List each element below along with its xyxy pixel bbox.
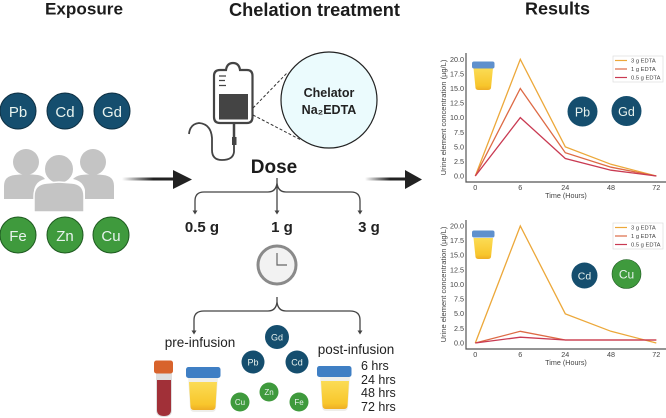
y axis labels: 20.0 <box>450 222 464 230</box>
dose labels: 3 g <box>358 219 380 236</box>
metals cluster: Cu <box>235 398 245 407</box>
metals cluster: Zn <box>264 388 274 397</box>
exposure metals: toxic: Cd <box>55 104 75 121</box>
y axis labels <box>450 55 464 180</box>
exposure metals: essential: Zn <box>56 228 74 245</box>
x axis labels: 72 <box>652 183 660 192</box>
x axis labels <box>439 226 660 367</box>
exposure metals: essential <box>0 217 129 253</box>
legend: 0.5 g EDTA <box>631 242 661 248</box>
chart: Pb and Gd <box>439 53 666 200</box>
legend: 0.5 g EDTA <box>631 76 661 82</box>
line: 0.5 g EDTA <box>475 118 656 176</box>
y axis labels: 7.5 <box>454 294 464 304</box>
chart: Cd and Cu <box>439 220 666 367</box>
dose labels <box>185 219 380 236</box>
icon: urine cup pre-infusion <box>186 367 220 412</box>
arrow: dose bracket <box>192 178 362 214</box>
y axis labels: 5.0 <box>454 309 464 318</box>
icon: blood tube <box>154 360 173 417</box>
line: 1 g EDTA <box>475 331 656 343</box>
x axis labels <box>439 59 660 200</box>
line: 3 g EDTA <box>475 226 656 343</box>
metals cluster <box>230 325 308 412</box>
line: 3 g EDTA <box>475 59 656 176</box>
y axis labels: 10.0 <box>450 113 464 122</box>
x axis labels: 48 <box>607 183 615 192</box>
x axis labels: Time (Hours) <box>545 191 587 200</box>
icon: clock <box>258 246 296 284</box>
element: Gd <box>612 96 642 126</box>
label: sampling times: 72 hrs <box>361 400 396 414</box>
chart: Pb and Gd: Pb <box>575 106 590 120</box>
y axis labels: 0.0 <box>454 338 464 348</box>
y axis labels: 7.5 <box>454 128 464 137</box>
legend <box>613 56 663 82</box>
label: post-infusion: post-infusion <box>318 342 394 357</box>
icon: urine cup post-infusion <box>317 366 352 411</box>
legend <box>613 223 663 249</box>
exposure metals: essential: Fe <box>9 228 27 245</box>
heading: Chelation treatment: Chelation treatment <box>229 0 400 20</box>
label: sampling times: 6 hrs <box>361 359 389 373</box>
callout: chelator <box>281 52 377 148</box>
y axis labels: 0.0 <box>454 172 464 180</box>
callout: chelator: Na₂EDTA <box>302 103 356 117</box>
label: sampling times: 48 hrs <box>361 386 396 400</box>
element: Pb <box>568 96 598 126</box>
chart: Pb and Gd: Gd <box>618 105 635 119</box>
icon: urine cup <box>472 230 494 259</box>
callout: chelator: Chelator <box>304 86 354 100</box>
y axis labels: 12.5 <box>450 99 464 108</box>
y axis labels: 20.0 <box>450 55 464 64</box>
label: pre-infusion: pre-infusion <box>165 335 235 350</box>
y axis labels: 10.0 <box>450 280 464 289</box>
x axis labels: 0 <box>473 183 477 192</box>
arrow: sampling bracket <box>192 297 362 334</box>
dose labels: 0.5 g <box>185 219 219 236</box>
x axis labels: 6 <box>518 183 522 192</box>
x axis labels: Urine element concentration (µg/L) <box>439 59 448 175</box>
metals cluster: Fe <box>294 398 304 407</box>
x axis labels: 72 <box>652 350 660 359</box>
y axis labels <box>450 222 464 348</box>
element: Cd <box>572 262 598 288</box>
y axis labels: 17.5 <box>450 69 464 78</box>
legend: 1 g EDTA <box>631 67 656 73</box>
x axis labels: Time (Hours) <box>545 358 587 367</box>
metals cluster: Pb <box>247 358 259 368</box>
x axis labels: 24 <box>561 183 569 192</box>
exposure metals: toxic <box>0 93 130 129</box>
line: 0.5 g EDTA <box>475 337 656 343</box>
metals cluster: Gd <box>271 332 283 342</box>
x axis labels: 6 <box>518 350 522 359</box>
exposure metals: essential: Cu <box>101 228 121 245</box>
heading: Exposure: Exposure <box>45 0 123 18</box>
exposure metals: toxic: Pb <box>9 104 27 121</box>
metals cluster: Cd <box>291 358 303 368</box>
y axis labels: 15.0 <box>450 251 464 260</box>
y axis labels: 15.0 <box>450 84 464 93</box>
exposure metals: toxic: Gd <box>102 104 122 121</box>
arrow: treatment to results <box>365 170 422 189</box>
chart: Cd and Cu: Cd <box>578 270 591 282</box>
x axis labels: 0 <box>473 350 477 359</box>
y axis labels: 17.5 <box>450 236 464 245</box>
line: 1 g EDTA <box>475 88 656 176</box>
element: Cu <box>612 260 641 288</box>
dose labels: 1 g <box>271 219 293 236</box>
legend: 1 g EDTA <box>631 234 656 240</box>
x axis labels: Urine element concentration (µg/L) <box>439 226 448 342</box>
label: sampling times <box>361 359 396 414</box>
y axis labels: 2.5 <box>454 157 464 166</box>
legend: 3 g EDTA <box>631 226 656 232</box>
y axis labels: 5.0 <box>454 142 464 151</box>
y axis labels: 2.5 <box>454 324 464 333</box>
icon: urine cup <box>472 62 494 90</box>
icon: IV bag <box>189 63 301 160</box>
legend: 3 g EDTA <box>631 58 656 64</box>
icon: group of people <box>4 149 114 212</box>
y axis labels: 12.5 <box>450 265 464 274</box>
arrow: exposure to treatment <box>122 170 192 189</box>
chart: Cd and Cu: Cu <box>619 268 634 282</box>
heading: Dose: Dose <box>251 157 297 178</box>
x axis labels: 48 <box>607 350 615 359</box>
x axis labels: 24 <box>561 350 569 359</box>
label: sampling times: 24 hrs <box>361 373 396 387</box>
